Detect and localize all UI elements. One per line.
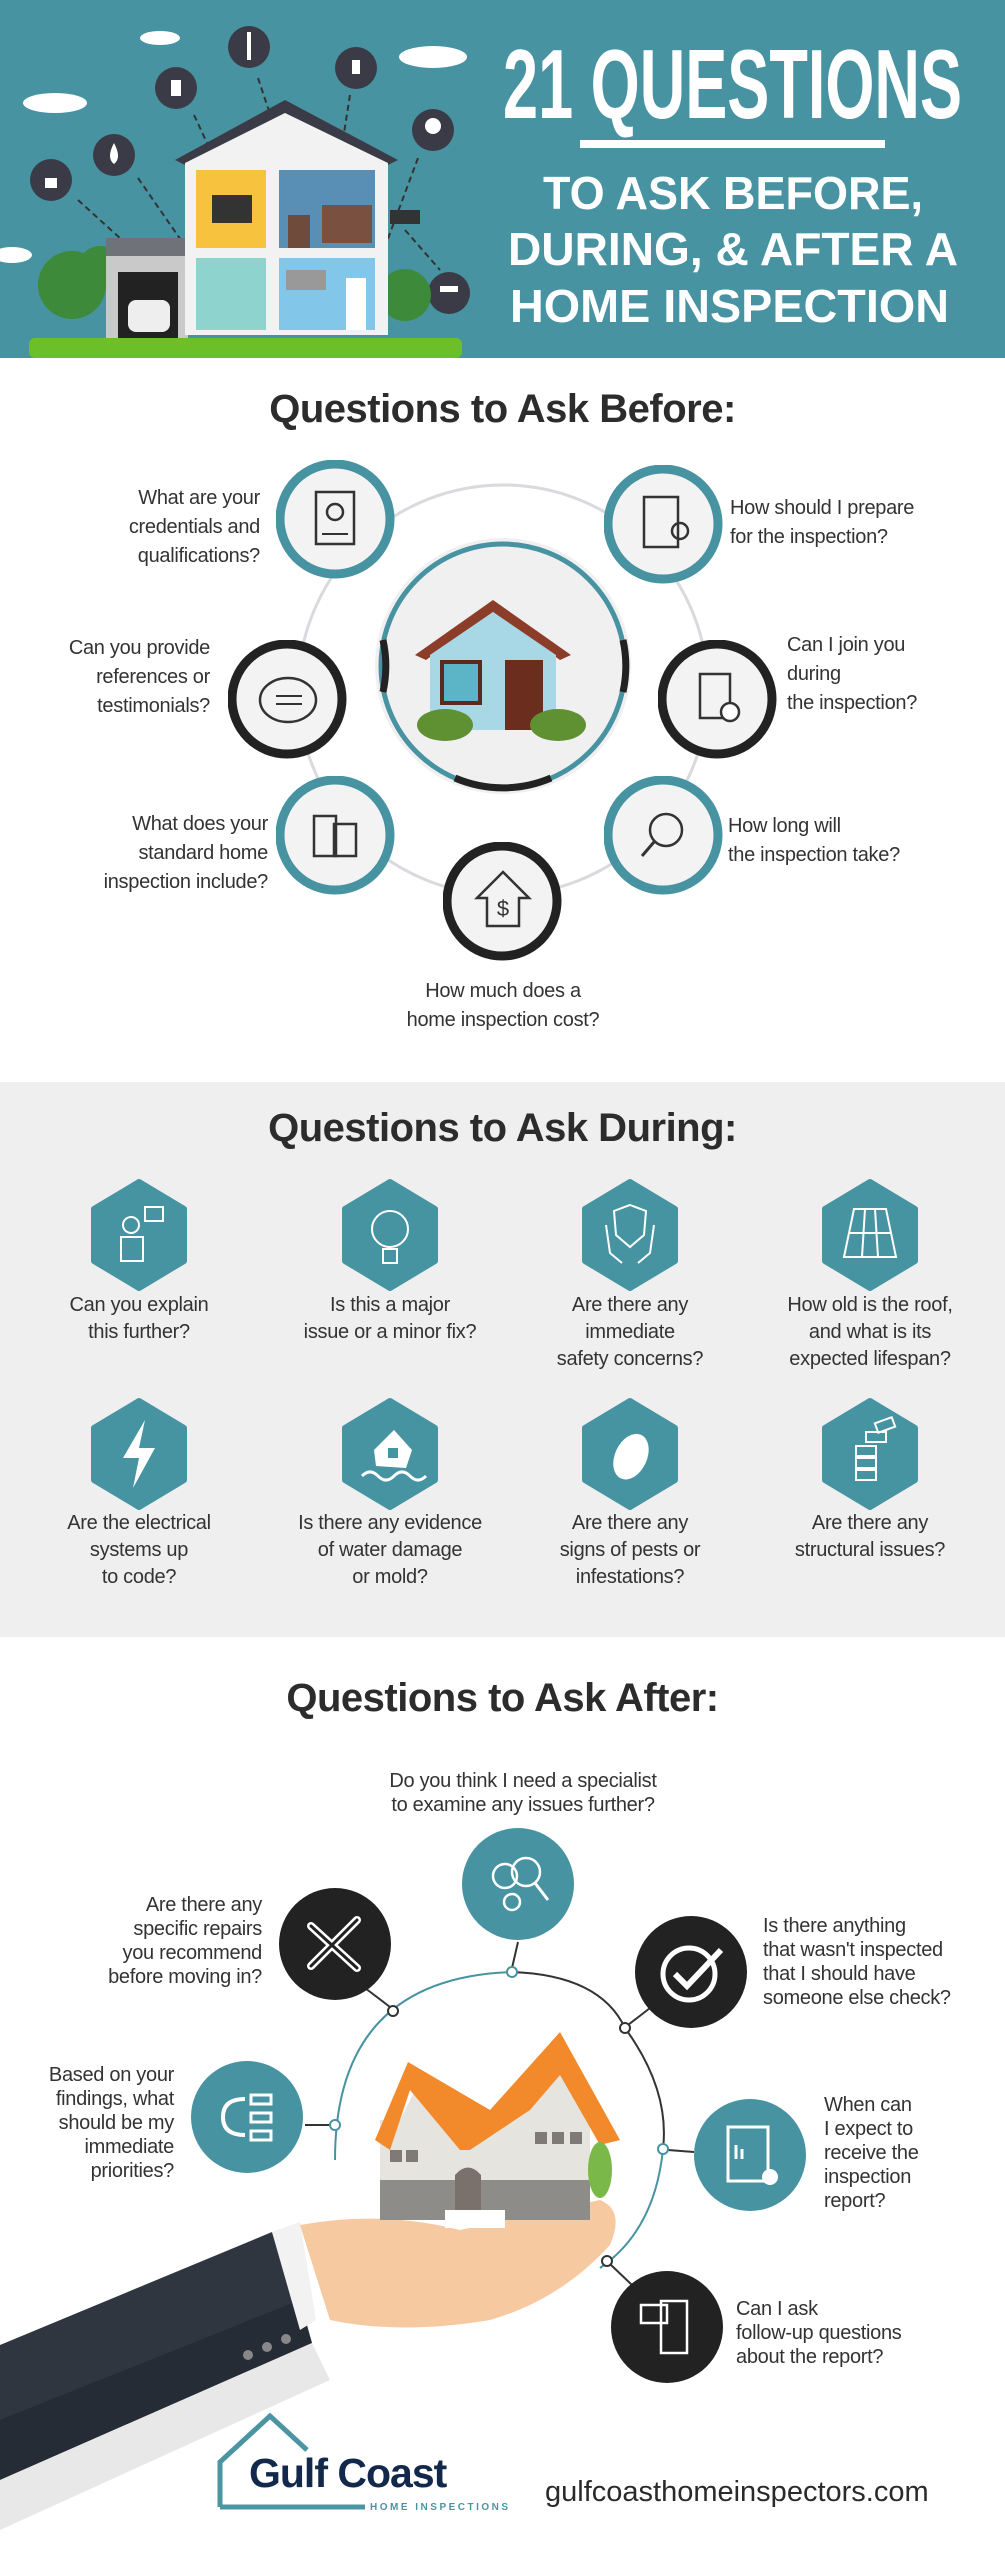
icon circle: report (694, 2099, 806, 2211)
text: repairs (108, 1894, 262, 1988)
text: safety: Are there any (572, 1294, 688, 1316)
hex: roof (825, 1182, 915, 1288)
icon circle: how long (604, 776, 722, 894)
text: specialist: to examine any issues further? (391, 1794, 655, 1816)
text: water: of water damage (318, 1539, 462, 1561)
icon circle: credentials (276, 460, 394, 578)
website url: gulfcoasthomeinspectors.com (545, 2476, 929, 2508)
text: pests (560, 1512, 700, 1588)
text: explain (70, 1294, 208, 1343)
text: specialist (389, 1770, 657, 1816)
icon circle: references (228, 640, 346, 758)
icon circle: follow-up (611, 2271, 723, 2383)
text: credentials: What are your (138, 487, 260, 509)
icon circle: check (635, 1916, 747, 2028)
trees (38, 251, 106, 319)
text: electrical: systems up (90, 1539, 188, 1561)
header illustration: smart house (0, 26, 470, 358)
text: repairs: specific repairs (133, 1918, 262, 1940)
text: structural (795, 1512, 945, 1561)
text: cost: How much does a (425, 980, 581, 1002)
text: prepare: How should I prepare (730, 497, 914, 519)
text: repairs: Are there any (146, 1894, 262, 1916)
text: prepare (730, 497, 914, 548)
garage (106, 250, 188, 340)
logo: Gulf Coast (249, 2450, 446, 2496)
text: references (69, 637, 210, 717)
text: check: that I should have (763, 1963, 916, 1985)
text: prepare: for the inspection? (730, 526, 888, 548)
text: priorities (49, 2064, 174, 2182)
text: join: Can I join you (787, 634, 905, 656)
house on hand (375, 2032, 620, 2228)
text: water: Is there any evidence (298, 1512, 482, 1534)
text: follow-up (736, 2298, 902, 2368)
text: check: someone else check? (763, 1987, 951, 2009)
text: references: references or (96, 666, 210, 688)
text: major: Is this a major (330, 1294, 450, 1316)
text: how long (728, 815, 900, 866)
text: report: When can (824, 2094, 912, 2116)
text: explain: this further? (88, 1321, 190, 1343)
text: electrical (67, 1512, 211, 1588)
text: cost: home inspection cost? (407, 1009, 599, 1031)
text: priorities: Based on your (49, 2064, 174, 2086)
title: DURING, & AFTER A (508, 223, 958, 275)
text: pests: Are there any (572, 1512, 688, 1534)
text: credentials: credentials and (129, 516, 260, 538)
text: specialist: Do you think I need a specialist (389, 1770, 657, 1792)
text: roof: How old is the roof, (787, 1294, 953, 1316)
house (175, 100, 398, 165)
arc (335, 1972, 512, 2160)
icon circle: prepare (604, 465, 722, 584)
panel: after diagram (0, 1942, 694, 2530)
hex: explain (94, 1182, 184, 1288)
text: roof: and what is its (809, 1321, 931, 1343)
text: join: the inspection? (787, 692, 917, 714)
text: priorities: should be my (59, 2112, 174, 2134)
text: join: during (787, 663, 841, 685)
icon circle: cost (443, 842, 562, 960)
text: check (763, 1915, 951, 2009)
text: standard: inspection include? (104, 871, 268, 893)
text: follow-up: follow-up questions (736, 2322, 902, 2344)
title: HOME INSPECTION (510, 280, 949, 332)
heading: before: Questions to Ask Before: (269, 387, 736, 431)
text: standard (104, 813, 268, 893)
text: water: or mold? (352, 1566, 428, 1588)
text: credentials: qualifications? (138, 545, 260, 567)
text: priorities: priorities? (91, 2160, 174, 2182)
hex icons grid (91, 1179, 918, 1510)
title: TO ASK BEFORE, (543, 167, 923, 219)
hex: safety (585, 1182, 675, 1288)
icon circle: priorities (191, 2061, 303, 2173)
text: safety: safety concerns? (557, 1348, 703, 1370)
text: structural: Are there any (812, 1512, 928, 1534)
text: water (298, 1512, 482, 1588)
text: pests: infestations? (576, 1566, 684, 1588)
panel: before diagram (228, 460, 776, 960)
hex: structural (825, 1401, 915, 1507)
text: follow-up: about the report? (736, 2346, 883, 2368)
text: priorities: immediate (84, 2136, 174, 2158)
text: structural: structural issues? (795, 1539, 945, 1561)
heading: during: Questions to Ask During: (268, 1106, 737, 1150)
text: priorities: findings, what (56, 2088, 174, 2110)
panel: during (0, 1082, 1005, 1637)
text: credentials (129, 487, 260, 567)
logo: HOME INSPECTIONS (370, 2502, 511, 2513)
text: repairs: before moving in? (108, 1966, 262, 1988)
text: repairs: you recommend (122, 1942, 262, 1964)
text: safety (557, 1294, 703, 1370)
icon circle: specialist (462, 1828, 574, 1940)
text: join (787, 634, 917, 714)
text: explain: Can you explain (70, 1294, 208, 1316)
hex: pests (585, 1401, 675, 1507)
text: report: report? (824, 2190, 885, 2212)
text: pests: signs of pests or (560, 1539, 700, 1561)
text: check: that wasn't inspected (763, 1939, 943, 1961)
header banner (0, 0, 1005, 358)
text: standard: What does your (132, 813, 268, 835)
text: references: Can you provide (69, 637, 210, 659)
text: safety: immediate (585, 1321, 675, 1343)
hex: water (345, 1401, 435, 1507)
text: report: receive the (824, 2142, 919, 2164)
text: report: I expect to (824, 2118, 913, 2140)
text: report: inspection (824, 2166, 911, 2188)
arm and hand (0, 2200, 616, 2530)
text: how long: How long will (728, 815, 841, 837)
text: electrical: to code? (102, 1566, 176, 1588)
text: check: Is there anything (763, 1915, 906, 1937)
icon circle: cost: $ (497, 896, 509, 921)
ground (29, 338, 462, 358)
text: roof: expected lifespan? (789, 1348, 951, 1370)
title (503, 29, 962, 332)
text: roof (787, 1294, 953, 1370)
text: report (824, 2094, 919, 2212)
text: major (304, 1294, 476, 1343)
text: major: issue or a minor fix? (304, 1321, 476, 1343)
hex: electrical (94, 1401, 184, 1507)
text: follow-up: Can I ask (736, 2298, 818, 2320)
hex: major (345, 1182, 435, 1288)
icon circle: join (658, 640, 776, 758)
central house circle (375, 538, 631, 794)
icon circle: standard inspection (276, 776, 394, 894)
text: standard: standard home (138, 842, 268, 864)
heading: after: Questions to Ask After: (286, 1676, 719, 1720)
logo (218, 2412, 511, 2513)
text: cost (407, 980, 599, 1031)
text: electrical: Are the electrical (67, 1512, 211, 1534)
text: how long: the inspection take? (728, 844, 900, 866)
text: references: testimonials? (97, 695, 210, 717)
icon circle: repairs (279, 1888, 391, 2000)
